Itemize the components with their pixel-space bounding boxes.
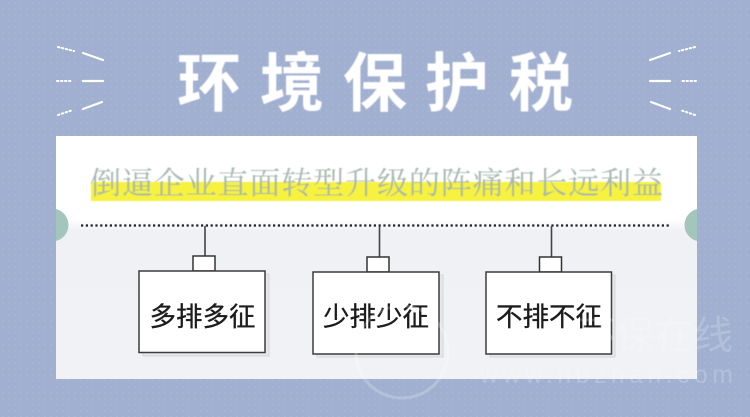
icon: left sparkle lines [57, 47, 103, 115]
title: 环 [177, 48, 241, 120]
icon: right sparkle lines [650, 47, 696, 115]
title: 税 [509, 48, 573, 120]
card: 少排少征 [313, 226, 443, 357]
title [177, 48, 573, 120]
title: 境 [260, 48, 324, 120]
title: 保 [343, 48, 407, 120]
card: 少排少征: 少排少征 [323, 302, 429, 332]
highlight: yellow marker [91, 182, 661, 201]
dotted divider [81, 224, 670, 227]
card: 不排不征: 不排不征 [496, 302, 602, 332]
watermark: www.hbzhan.com [479, 361, 733, 389]
card: 不排不征 [486, 226, 615, 357]
watermark [356, 306, 733, 398]
card: 多排多征: 多排多征 [150, 302, 256, 332]
left mint semicircle [56, 209, 68, 241]
panel: main card [56, 136, 697, 379]
card: 多排多征 [139, 226, 269, 356]
watermark: 环保在线 [577, 315, 733, 358]
right mint semicircle [685, 209, 697, 241]
subtitle: 倒逼企业直面转型升级的阵痛和长远利益 [90, 166, 663, 201]
title: 护 [425, 48, 489, 120]
